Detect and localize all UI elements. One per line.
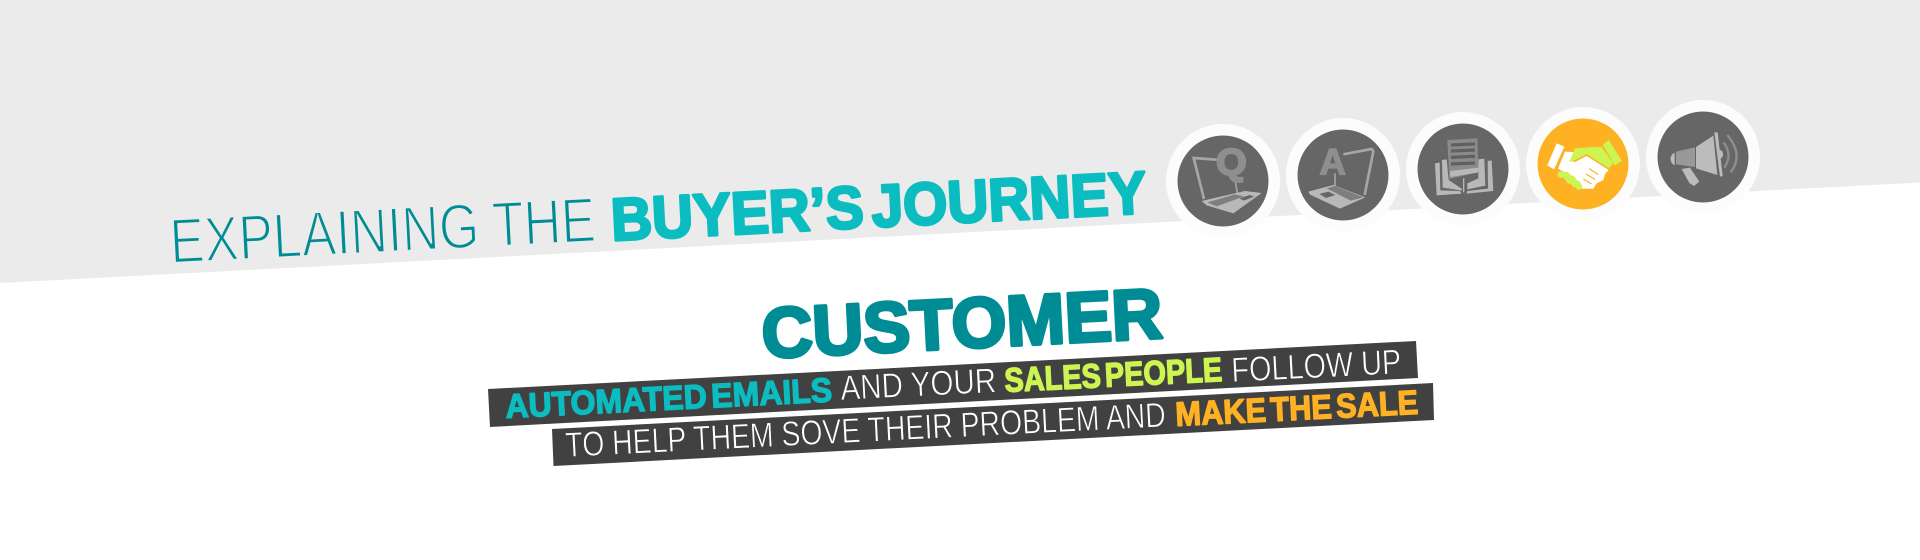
caption line 2: MAKE THE SALE [1174,384,1419,434]
heading: customer: CUSTOMER [760,275,1164,374]
icon row [1166,100,1760,238]
icon: megaphone [1646,100,1760,214]
icon: laptop with Q [1166,124,1280,238]
caption line 1: SALES PEOPLE [1003,351,1223,400]
title: light part: EXPLAINING THE [168,185,597,277]
icon: laptop with A: A [1319,142,1346,183]
grey slanted header band [0,0,1920,283]
icon: handshake, highlighted [1526,107,1640,221]
icon: laptop with A [1286,118,1400,232]
caption line 1: AND YOUR [839,361,997,408]
caption line 1: AUTOMATED EMAILS [504,371,833,426]
caption line 1: FOLLOW UP [1230,342,1402,390]
caption line 1 [488,341,1418,427]
title [168,159,1148,277]
title: bold part: BUYER’S JOURNEY [609,159,1148,253]
caption line 2: TO HELP THEM SOVE THEIR PROBLEM AND [564,396,1167,465]
icon: book and document [1406,112,1520,226]
icon: laptop with Q: Q [1216,141,1247,182]
